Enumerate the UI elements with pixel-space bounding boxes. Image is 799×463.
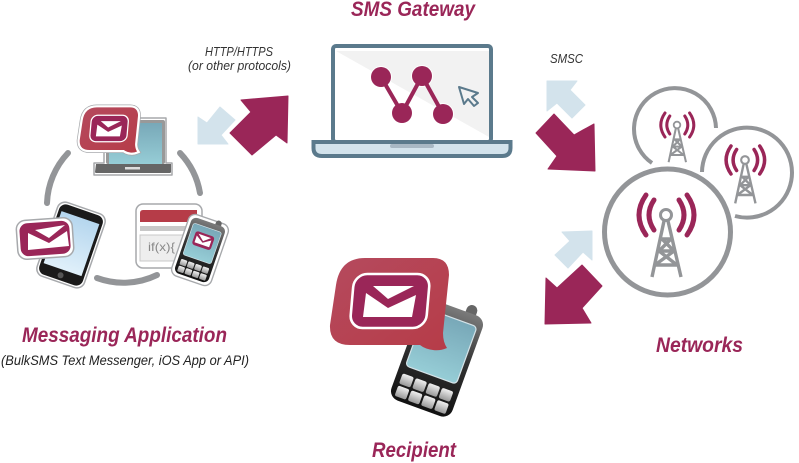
icon: tower circle small top <box>634 88 716 163</box>
icon: gateway logo nodes <box>370 65 454 125</box>
label: HTTP protocols: HTTP/HTTPS <box>205 44 273 59</box>
icon: recipient phone with message bubble <box>330 258 489 419</box>
arrow: light left arrow to messaging application <box>198 107 235 144</box>
cycle arcs: messaging application <box>47 153 200 283</box>
icon: code window with phone: if(x){ <box>148 240 175 254</box>
label: HTTP protocols: (or other protocols) <box>188 58 291 73</box>
arrow: light arrow to networks <box>555 231 592 268</box>
icon: tower circle right <box>702 128 792 218</box>
icon: cursor <box>459 87 478 106</box>
arrow: light arrow from networks to gateway <box>547 81 585 118</box>
icon: code window with phone <box>136 204 231 287</box>
icon: tower circle large <box>604 169 730 295</box>
arrow: dark arrow to SMS gateway <box>230 96 288 155</box>
icon: SMS gateway laptop <box>314 46 510 156</box>
title: Recipient: Recipient <box>372 439 457 462</box>
label: HTTP protocols <box>188 44 291 73</box>
arrow: dark arrow from gateway to networks <box>536 114 595 171</box>
label: SMSC: SMSC <box>550 51 584 66</box>
icon: smartphone with envelope <box>16 200 107 290</box>
title: Networks: Networks <box>656 334 743 357</box>
subtitle: messaging application detail: (BulkSMS Text Messenger, iOS App or API) <box>1 352 249 368</box>
title: Messaging Application: Messaging Application <box>22 324 227 347</box>
arrow: dark arrow to recipient <box>545 265 602 324</box>
icon: network towers <box>604 88 792 295</box>
icon: laptop with message bubble <box>80 107 172 175</box>
